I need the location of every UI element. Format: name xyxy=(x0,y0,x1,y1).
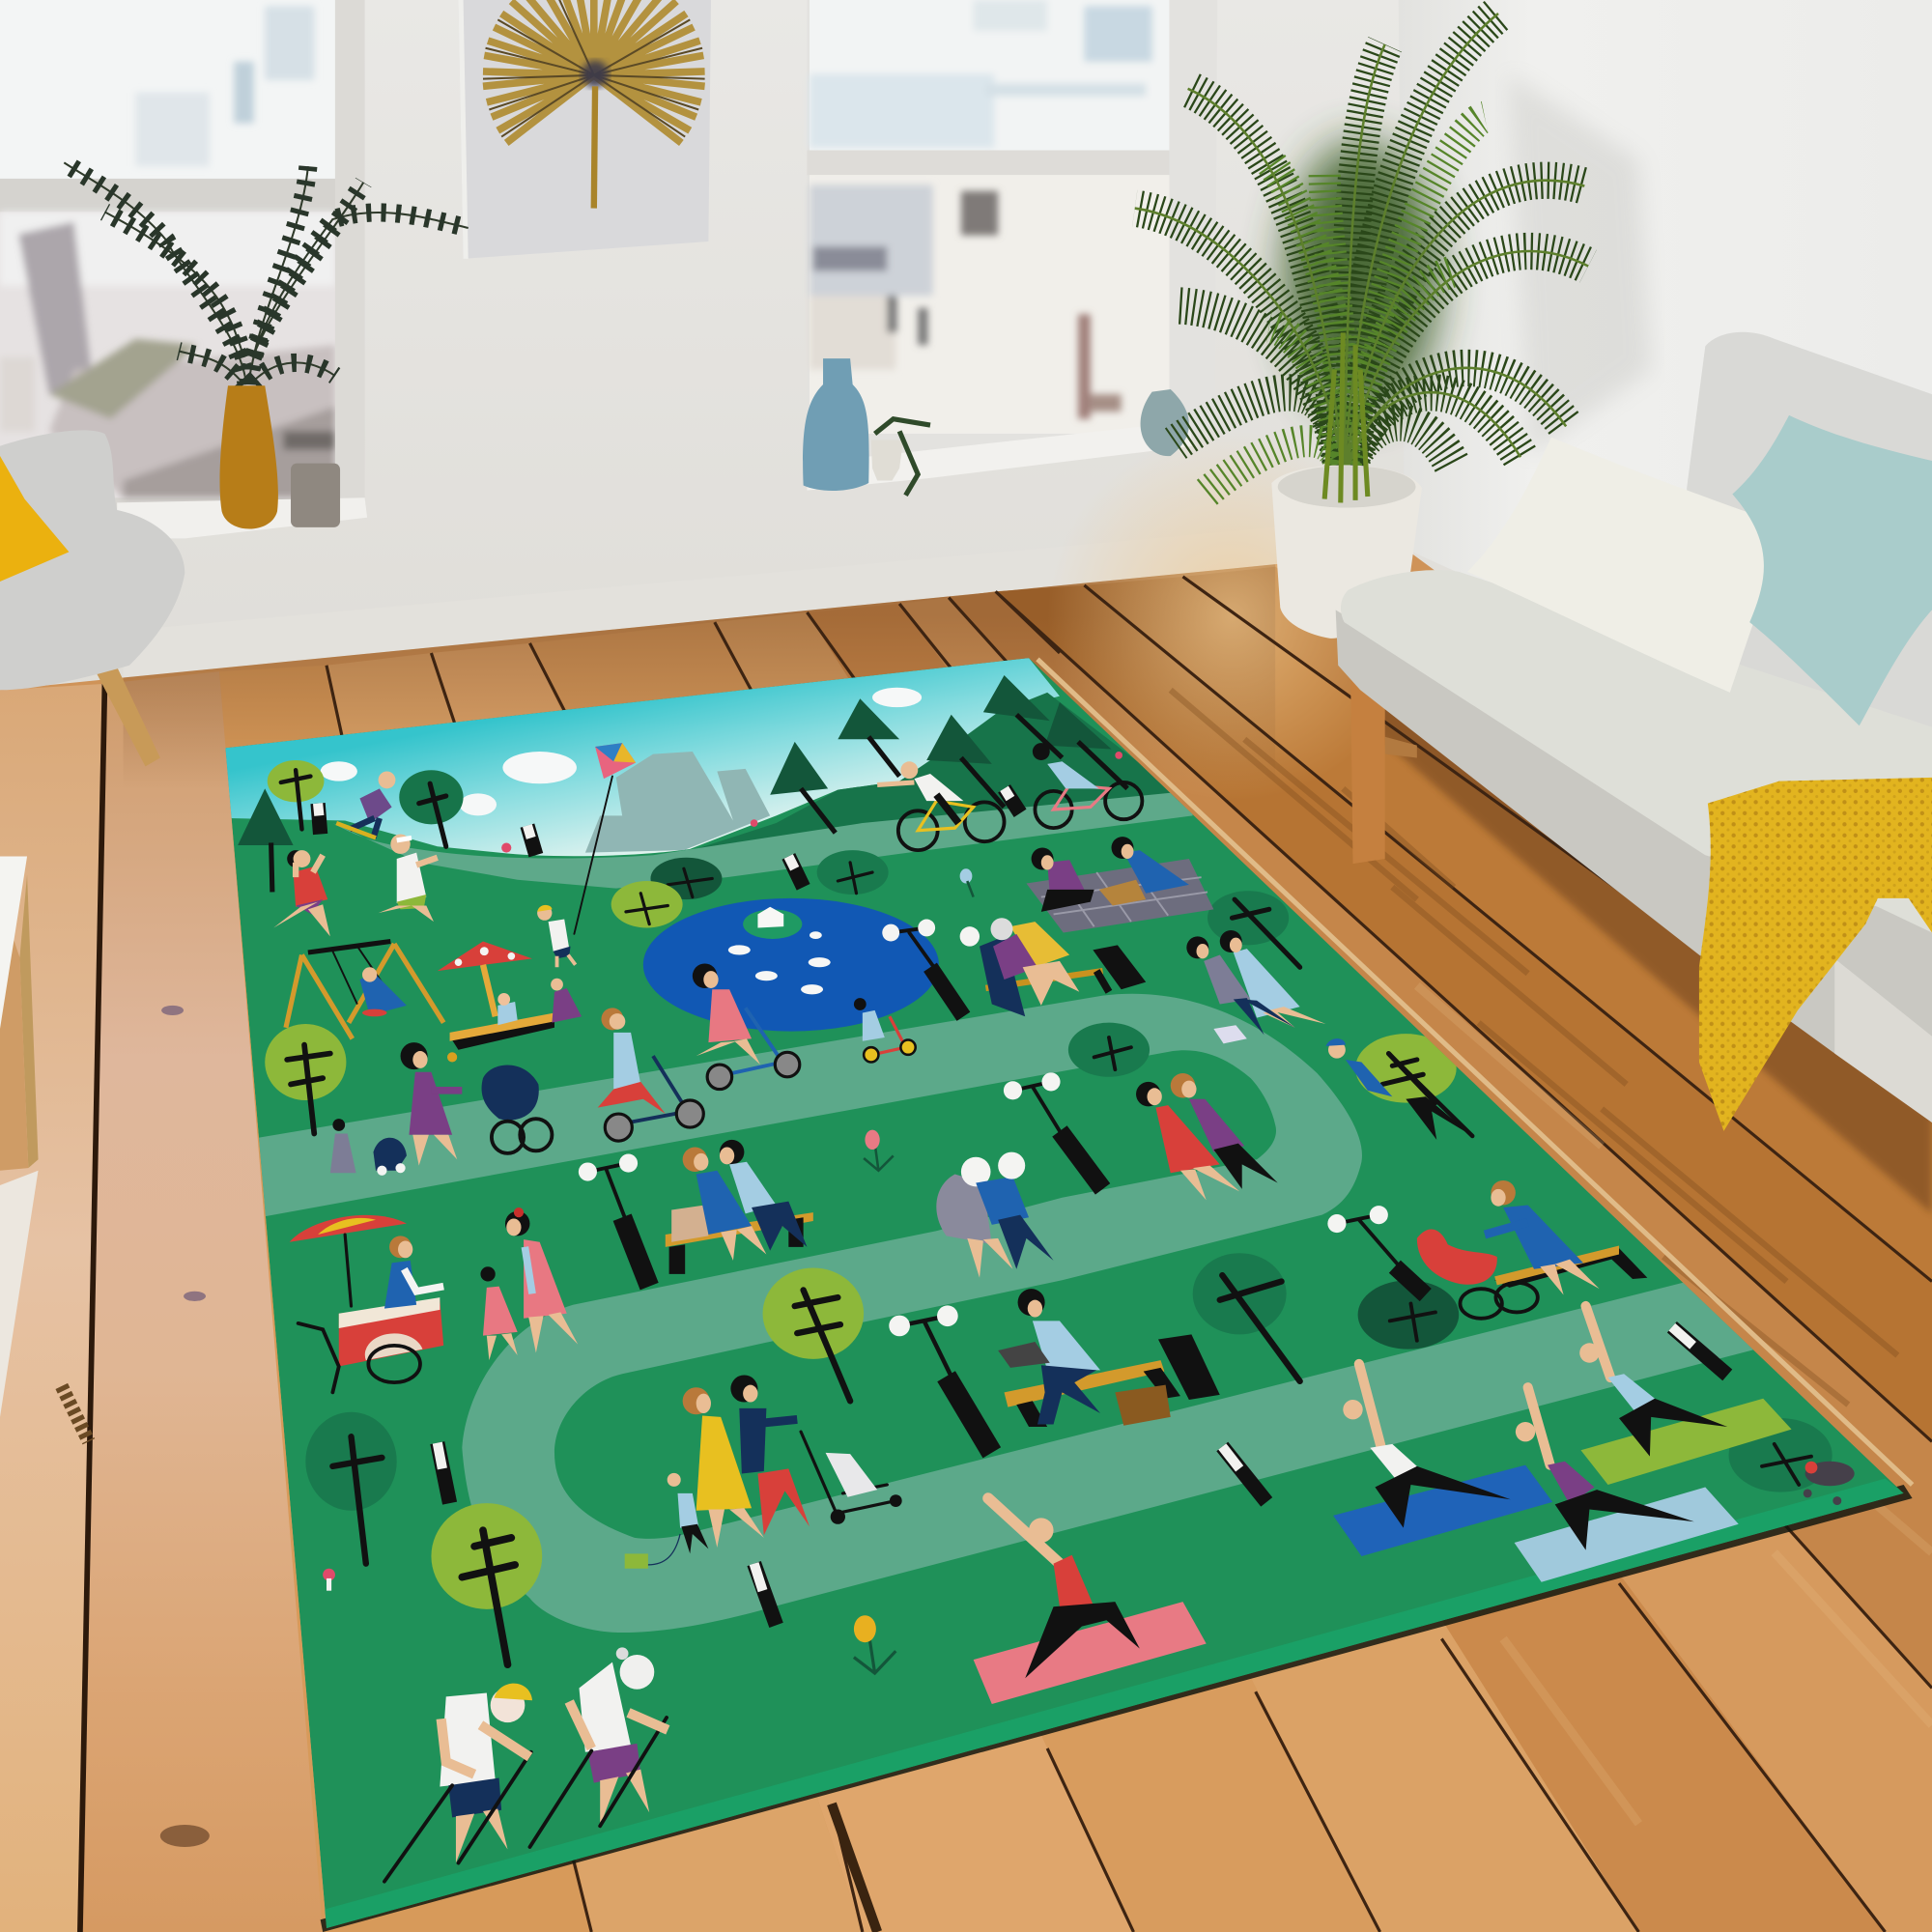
yoga mats xyxy=(974,1399,1792,1704)
runner in white xyxy=(379,835,438,922)
right wall xyxy=(1399,0,1932,788)
cyclists xyxy=(877,743,1142,850)
side table corner xyxy=(0,856,39,1417)
walking couple xyxy=(1136,1073,1278,1200)
teal cushion xyxy=(1732,415,1932,725)
round trees xyxy=(265,760,1457,1664)
city skyline xyxy=(585,752,770,853)
window: left xyxy=(0,0,367,538)
couple walking dog xyxy=(1186,930,1325,1043)
hedgehog xyxy=(1804,1462,1855,1505)
winding path xyxy=(246,994,1775,1633)
picnic blanket and couple xyxy=(1026,837,1213,933)
baseboard xyxy=(124,527,1275,680)
wall xyxy=(0,0,1932,702)
grey cup xyxy=(291,464,340,527)
skateboarder xyxy=(336,771,395,838)
rug xyxy=(225,658,1904,1928)
man on scooter xyxy=(598,1008,703,1141)
lamp posts xyxy=(579,920,1426,1453)
window: right xyxy=(807,0,1217,491)
yellow cushion xyxy=(0,456,69,582)
plant shadow on wall xyxy=(1509,74,1651,456)
bushes xyxy=(611,850,1833,1492)
elderly couple on bench xyxy=(960,918,1146,1016)
sandbox with mushroom umbrella xyxy=(438,941,582,1050)
floor top shading xyxy=(124,564,1275,788)
rug shadow xyxy=(321,1485,1913,1932)
pond island xyxy=(743,907,802,939)
rug border xyxy=(323,1479,1904,1928)
pond xyxy=(643,898,939,1032)
white cushion xyxy=(1467,438,1792,693)
sky xyxy=(225,658,1060,856)
yellow throw xyxy=(1699,778,1932,1131)
small girl with doll pram xyxy=(330,1119,407,1176)
guard behind tree xyxy=(1325,1038,1472,1140)
child on scooter xyxy=(854,998,916,1062)
swing set xyxy=(286,941,443,1038)
elderly women with ice cream xyxy=(936,1152,1054,1278)
potted palm xyxy=(1135,14,1588,639)
family with stroller xyxy=(625,1375,902,1569)
plant pot xyxy=(1271,465,1422,639)
sofa base front xyxy=(1336,610,1932,1122)
Nordic walkers xyxy=(384,1647,668,1882)
yoga woman on light blue mat xyxy=(1516,1387,1694,1550)
kite and string xyxy=(574,743,636,934)
sofa xyxy=(1336,332,1932,1131)
sofa leg xyxy=(1385,737,1417,757)
yoga woman on pink mat xyxy=(988,1498,1140,1678)
sofa back xyxy=(1687,332,1932,788)
tulips and mushrooms xyxy=(323,752,1122,1673)
sofa seat cushion xyxy=(1341,570,1932,933)
kid with kite xyxy=(537,905,576,967)
pine trees xyxy=(238,675,1127,892)
glass vase xyxy=(1141,389,1189,456)
upper path xyxy=(332,791,1193,889)
wood grain streaks xyxy=(1171,690,1897,1405)
hills xyxy=(696,693,1189,849)
wood floor xyxy=(0,431,1932,1932)
poster: gold fan palm xyxy=(458,0,711,259)
ducks xyxy=(728,931,831,994)
blue vase xyxy=(803,358,1189,496)
yoga man on lime mat xyxy=(1579,1306,1727,1457)
runner in red xyxy=(273,850,330,936)
yoga man on blue mat xyxy=(1343,1364,1511,1528)
man with laptop on bench xyxy=(998,1289,1220,1427)
clouds xyxy=(321,688,922,815)
vase with branches xyxy=(64,162,469,529)
shadow under sofa xyxy=(1361,671,1932,1213)
armchair xyxy=(0,430,185,766)
woman on bench with red pram xyxy=(1417,1180,1647,1319)
bench couple xyxy=(666,1140,813,1274)
rug edge highlight on floor xyxy=(1037,659,1913,1485)
floor highlight by pot xyxy=(1047,431,1417,801)
bollards xyxy=(318,788,1727,1625)
mother and daughter xyxy=(480,1208,578,1360)
ice cream cart xyxy=(290,1215,443,1392)
woman on scooter xyxy=(693,963,800,1090)
knots xyxy=(160,1825,210,1847)
woman with pram xyxy=(401,1042,552,1166)
